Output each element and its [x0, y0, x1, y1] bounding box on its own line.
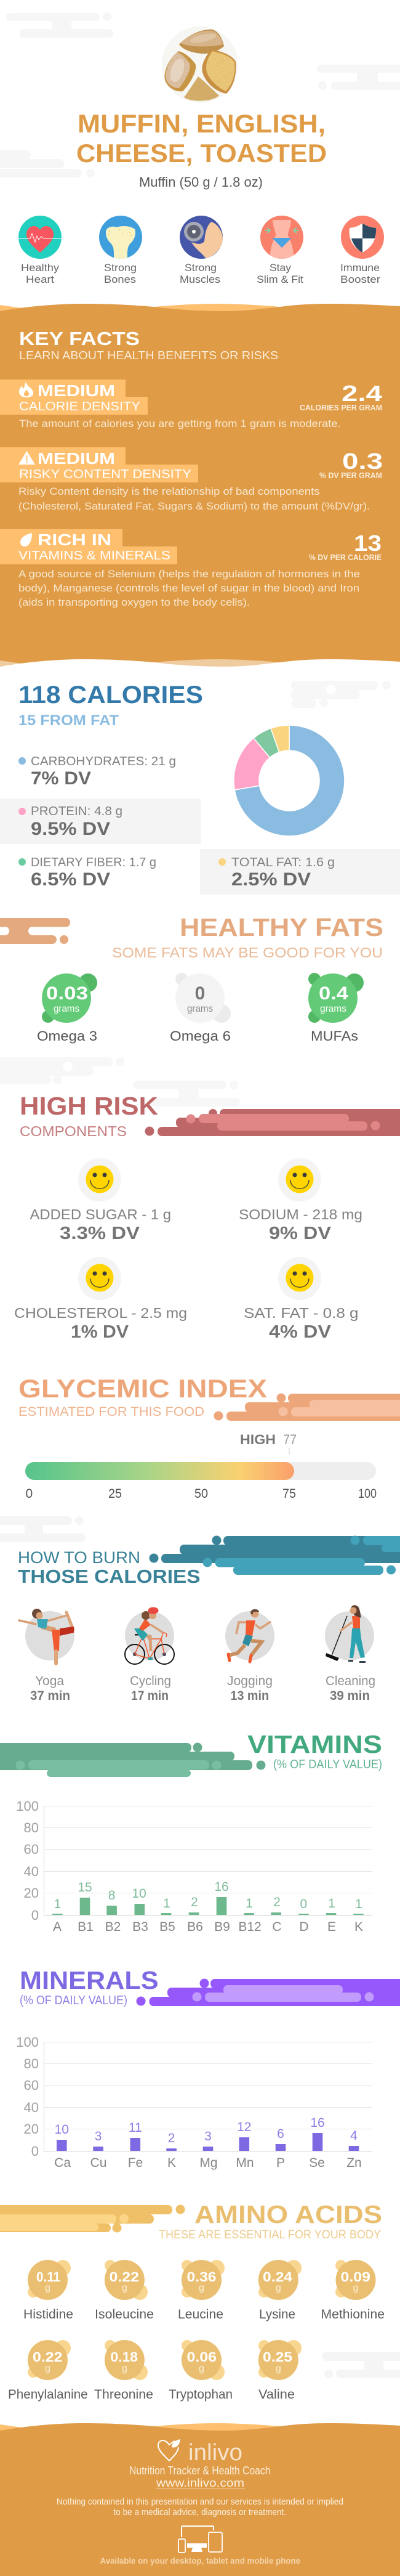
- amino: isoleucine: g: [122, 2283, 127, 2293]
- fat: omega 3: 0.03: [46, 983, 88, 1004]
- legend: dietary fiber: [18, 856, 156, 890]
- bar chart: vitamins: 16: [214, 1880, 229, 1894]
- decorative cloud: amino acids: [322, 2352, 400, 2378]
- fat: MUFAs: 0.4: [319, 983, 348, 1004]
- fact: risky content density: MEDIUM: [38, 449, 115, 468]
- benefit: healthy heart: Heart: [26, 274, 54, 285]
- bar chart: vitamins: A: [53, 1920, 62, 1934]
- title: [76, 109, 327, 168]
- heading: amino acids: AMINO ACIDS: [194, 2200, 382, 2229]
- tagline and website: www.inlivo.com: [156, 2477, 244, 2489]
- serving size: Muffin (50 g / 1.8 oz): [139, 174, 263, 190]
- amino: leucine: Leucine: [178, 2307, 223, 2322]
- bar chart: minerals: Se: [309, 2156, 325, 2170]
- disclaimer: [57, 2497, 343, 2517]
- amino: methionine: g: [353, 2283, 358, 2293]
- bar chart: vitamins: 0: [31, 1908, 39, 1923]
- heading: calories: 118 CALORIES: [18, 681, 203, 709]
- benefit: strong muscles: Strong: [185, 262, 217, 274]
- fact: rich in vitamins and minerals: RICH IN: [38, 530, 111, 549]
- amino: phenylalanine: Phenylalanine: [8, 2387, 88, 2402]
- bar chart: vitamins: 60: [24, 1842, 39, 1857]
- heading: glycemic index: [18, 1374, 267, 1419]
- decoration: amino acids band: [0, 2204, 185, 2233]
- decoration: glycemic band: [214, 1394, 400, 1421]
- amino: isoleucine: [95, 2260, 154, 2322]
- bar chart: minerals: 3: [95, 2129, 102, 2143]
- risk: cholesterol: CHOLESTEROL - 2.5 mg: [14, 1305, 187, 1321]
- bar chart: vitamins: 100: [16, 1798, 39, 1814]
- amino: histidine: 0.11: [36, 2269, 60, 2285]
- activity: cleaning: [325, 1605, 375, 1703]
- gauge: glycemic index value: 25: [108, 1487, 122, 1501]
- amino: lysine: g: [276, 2283, 281, 2293]
- bar chart: vitamins: 1: [54, 1897, 61, 1911]
- benefit: immune booster: Immune: [340, 262, 380, 274]
- bar chart: minerals: 40: [24, 2100, 39, 2115]
- benefit: healthy heart: Healthy: [21, 262, 60, 274]
- panel: key facts background: [0, 304, 400, 678]
- activity: jogging: [225, 1609, 274, 1703]
- activity: yoga: [19, 1609, 74, 1703]
- availability note: Available on your desktop, tablet and mobile phone: [100, 2556, 300, 2566]
- bar chart: minerals: 80: [24, 2056, 39, 2071]
- risk: sodium: 9% DV: [269, 1224, 332, 1243]
- fact: risky content density: RISKY CONTENT DENSITY: [19, 468, 191, 481]
- heading: calories: [18, 681, 203, 729]
- bar chart: vitamins: B9: [214, 1920, 230, 1934]
- food photo: english muffin: [162, 26, 238, 103]
- heading: minerals: [20, 1966, 159, 2007]
- legend: protein: [0, 798, 201, 844]
- disclaimer: Nothing contained in this presentation and our services is intended or implied: [57, 2497, 343, 2507]
- bar chart: minerals: 2: [168, 2131, 175, 2145]
- risk: added sugar: [30, 1158, 171, 1243]
- amino: valine: [258, 2340, 302, 2402]
- bar chart: vitamins: B2: [105, 1920, 121, 1934]
- bar chart: vitamins: D: [299, 1920, 309, 1934]
- amino: histidine: Histidine: [23, 2307, 73, 2322]
- amino: lysine: Lysine: [259, 2307, 295, 2322]
- bar chart: minerals: Ca: [54, 2156, 71, 2170]
- fat: omega 3: grams: [54, 1004, 79, 1014]
- bar chart: vitamins: 40: [24, 1864, 39, 1879]
- bar chart: vitamins: 8: [108, 1888, 115, 1903]
- bar chart: minerals: 6: [277, 2127, 284, 2141]
- legend: carbohydrates: 7% DV: [31, 768, 91, 789]
- amino: phenylalanine: g: [45, 2363, 50, 2374]
- risk: sodium: SODIUM - 218 mg: [239, 1206, 362, 1222]
- amino: valine: Valine: [258, 2387, 295, 2402]
- heading: key facts: [19, 328, 278, 362]
- bar chart: vitamins: B1: [78, 1920, 94, 1934]
- bar chart: minerals: 4: [350, 2129, 358, 2143]
- decorative clouds: header: [0, 12, 400, 177]
- heading: how to burn those calories: THOSE CALORIES: [18, 1566, 201, 1587]
- fact: calorie density: The amount of calories you are getting from 1 gram is moderate.: [19, 418, 341, 429]
- gauge: glycemic index value: HIGH: [240, 1432, 276, 1447]
- amino: lysine: [258, 2260, 302, 2322]
- legend: dietary fiber: DIETARY FIBER: 1.7 g: [31, 856, 156, 869]
- benefit: stay slim and fit: [257, 216, 303, 285]
- activity: yoga: 37 min: [30, 1689, 70, 1703]
- benefit: strong bones: [99, 216, 142, 285]
- activity: cleaning: 39 min: [330, 1689, 370, 1703]
- fat: omega 6: [170, 973, 231, 1044]
- benefit: immune booster: Booster: [340, 274, 380, 285]
- bar chart: vitamins: B6: [187, 1920, 203, 1934]
- tagline and website: [129, 2464, 271, 2489]
- fact: calorie density: CALORIE DENSITY: [19, 400, 140, 413]
- bar chart: minerals: 10: [55, 2123, 69, 2137]
- legend: protein: PROTEIN: 4.8 g: [31, 805, 122, 818]
- title: CHEESE, TOASTED: [76, 139, 327, 168]
- legend: carbohydrates: [18, 755, 176, 789]
- fact: rich in vitamins and minerals: 13: [354, 530, 382, 556]
- fact: rich in vitamins and minerals: body), Manganese (controls the level of sugar in the blood) and Iron: [18, 582, 359, 594]
- bar chart: minerals: 100: [16, 2034, 39, 2050]
- risk: cholesterol: 1% DV: [71, 1322, 129, 1342]
- fat: omega 6: Omega 6: [170, 1028, 231, 1044]
- bar chart: vitamins: 10: [132, 1887, 146, 1901]
- fact: risky content density: % DV PER GRAM: [319, 471, 382, 480]
- activity: cleaning: Cleaning: [326, 1674, 375, 1688]
- bar chart: minerals: Fe: [128, 2156, 143, 2170]
- legend: total fat: 2.5% DV: [231, 869, 311, 890]
- heading: vitamins: (% OF DAILY VALUE): [273, 1758, 382, 1771]
- activity: yoga: Yoga: [35, 1674, 64, 1688]
- benefit: stay slim and fit: Slim & Fit: [257, 274, 303, 285]
- bar chart: vitamins: K: [354, 1920, 363, 1934]
- benefit: immune booster: [340, 216, 384, 285]
- decoration: minerals band: [137, 1979, 400, 2006]
- decorative cloud: calories: [291, 681, 391, 708]
- bar chart: vitamins: [16, 1798, 373, 1934]
- bar chart: vitamins: 1: [246, 1896, 253, 1911]
- decoration: burn band: [149, 1535, 400, 1575]
- bar chart: minerals: Mn: [236, 2156, 254, 2170]
- bar chart: vitamins: 20: [24, 1885, 39, 1901]
- benefit: strong bones: Strong: [104, 262, 137, 274]
- heading: amino acids: [159, 2200, 382, 2241]
- fact: risky content density: 0.3: [342, 449, 383, 474]
- logo: inlivo: inlivo: [188, 2440, 242, 2466]
- heading: vitamins: [247, 1730, 382, 1771]
- risk: sodium: [239, 1158, 362, 1243]
- benefit: healthy heart: [18, 216, 62, 285]
- amino: tryptophan: [169, 2340, 233, 2402]
- heading: how to burn those calories: HOW TO BURN: [18, 1548, 140, 1567]
- activity: jogging: Jogging: [227, 1674, 273, 1688]
- fact: calorie density: 2.4: [342, 381, 382, 406]
- donut chart: macronutrients: [234, 725, 345, 836]
- disclaimer: to be a medical advice, diagnosis or treatment.: [113, 2508, 286, 2517]
- heading: key facts: LEARN ABOUT HEALTH BENEFITS OR RISKS: [19, 349, 278, 362]
- heading: minerals: (% OF DAILY VALUE): [20, 1994, 127, 2007]
- bar chart: vitamins: B5: [159, 1920, 175, 1934]
- activity: cycling: 17 min: [131, 1689, 169, 1703]
- decorative clouds: high risk: [0, 1057, 240, 1107]
- fat: MUFAs: MUFAs: [311, 1028, 358, 1044]
- fact: rich in vitamins and minerals: VITAMINS & MINERALS: [18, 549, 170, 563]
- risk: saturated fat: SAT. FAT - 0.8 g: [244, 1305, 358, 1321]
- gauge: glycemic index value: 50: [194, 1487, 208, 1501]
- amino: isoleucine: Isoleucine: [95, 2307, 154, 2322]
- decoration: healthy fats band: [0, 918, 71, 944]
- decorative cloud: burn: [0, 1516, 86, 1542]
- tagline and website: Nutrition Tracker & Health Coach: [129, 2464, 271, 2477]
- fact: risky content density: Risky Content density is the relationship of bad components: [18, 486, 320, 497]
- bar chart: vitamins: 1: [355, 1897, 362, 1911]
- amino: methionine: Methionine: [321, 2307, 385, 2322]
- bar chart: minerals: K: [167, 2156, 176, 2170]
- bar chart: vitamins: 80: [24, 1820, 39, 1835]
- fact: risky content density: [0, 447, 383, 512]
- gauge: glycemic index value: 100: [358, 1487, 377, 1501]
- footer background: [0, 2423, 400, 2576]
- amino: threonine: 0.18: [111, 2349, 138, 2365]
- bar chart: vitamins: 1: [163, 1896, 170, 1911]
- amino: valine: 0.25: [263, 2349, 292, 2365]
- bar chart: vitamins: 15: [78, 1880, 92, 1895]
- legend: dietary fiber: 6.5% DV: [31, 869, 110, 890]
- decoration: high risk band: [145, 1109, 400, 1136]
- fact: rich in vitamins and minerals: (aids in transporting oxygen to the body cells).: [18, 596, 250, 608]
- bar chart: minerals: [16, 2034, 373, 2170]
- risk: cholesterol: [14, 1257, 187, 1342]
- legend: total fat: TOTAL FAT: 1.6 g: [231, 856, 335, 869]
- heading: how to burn those calories: [18, 1548, 201, 1587]
- bar chart: vitamins: 2: [273, 1895, 281, 1909]
- bar chart: vitamins: 2: [191, 1895, 198, 1909]
- heading: vitamins: VITAMINS: [247, 1730, 382, 1758]
- fat: MUFAs: grams: [320, 1004, 346, 1014]
- logo: inlivo: [158, 2439, 242, 2466]
- legend: protein: 9.5% DV: [31, 819, 110, 839]
- fat: omega 3: [37, 973, 97, 1044]
- benefit: strong bones: Bones: [104, 274, 136, 285]
- amino: tryptophan: 0.06: [187, 2349, 217, 2365]
- heading: healthy fats: HEALTHY FATS: [180, 913, 383, 941]
- activity: cycling: Cycling: [130, 1674, 171, 1688]
- risk: saturated fat: [244, 1257, 358, 1342]
- amino: tryptophan: Tryptophan: [169, 2387, 233, 2402]
- legend: carbohydrates: CARBOHYDRATES: 21 g: [31, 755, 176, 768]
- fact: calorie density: [0, 380, 382, 429]
- amino: threonine: [94, 2340, 153, 2402]
- heading: key facts: KEY FACTS: [19, 328, 140, 349]
- bar chart: minerals: 11: [129, 2121, 142, 2135]
- gauge: glycemic index value: 0: [26, 1487, 33, 1501]
- fact: calorie density: CALORIES PER GRAM: [300, 403, 382, 412]
- amino: isoleucine: 0.22: [110, 2269, 139, 2285]
- bar chart: vitamins: 0: [300, 1897, 307, 1911]
- heading: glycemic index: GLYCEMIC INDEX: [18, 1374, 267, 1403]
- fact: rich in vitamins and minerals: % DV PER CALORIE: [309, 553, 382, 562]
- amino: lysine: 0.24: [263, 2269, 293, 2285]
- bar chart: vitamins: E: [327, 1920, 336, 1934]
- heading: high risk: [20, 1092, 158, 1139]
- gauge: glycemic index value: 75: [282, 1487, 296, 1501]
- fact: risky content density: (Cholesterol, Saturated Fat, Sugars & Sodium) to the amount (%DV/gr).: [18, 500, 370, 512]
- fact: rich in vitamins and minerals: A good source of Selenium (helps the regulation of hormones in the: [18, 568, 360, 580]
- heading: high risk: HIGH RISK: [20, 1092, 158, 1120]
- bar chart: vitamins: C: [272, 1920, 282, 1934]
- amino: threonine: Threonine: [94, 2387, 153, 2402]
- amino: valine: g: [276, 2363, 281, 2374]
- benefit: strong muscles: Muscles: [180, 274, 220, 285]
- bar chart: minerals: Zn: [346, 2156, 362, 2170]
- fat: omega 6: 0: [195, 983, 205, 1004]
- amino: methionine: 0.09: [341, 2269, 370, 2285]
- amino: tryptophan: g: [199, 2363, 204, 2374]
- bar chart: minerals: 20: [24, 2121, 39, 2137]
- fact: calorie density: MEDIUM: [38, 381, 115, 400]
- heading: high risk: COMPONENTS: [20, 1123, 127, 1139]
- benefit: stay slim and fit: Stay: [270, 262, 291, 274]
- gauge: glycemic index value: [25, 1432, 377, 1501]
- heading: glycemic index: ESTIMATED FOR THIS FOOD: [18, 1405, 204, 1419]
- bar chart: minerals: 3: [204, 2129, 212, 2143]
- heading: healthy fats: [112, 913, 383, 961]
- bar chart: minerals: 0: [31, 2143, 39, 2159]
- risk: added sugar: ADDED SUGAR - 1 g: [30, 1206, 171, 1222]
- benefit: strong muscles: [180, 216, 223, 285]
- bar chart: minerals: Cu: [90, 2156, 106, 2170]
- amino: methionine: [321, 2260, 385, 2322]
- heading: amino acids: THESE ARE ESSENTIAL FOR YOUR BODY: [159, 2228, 381, 2241]
- bar chart: vitamins: 1: [328, 1896, 335, 1911]
- decoration: vitamins band: [0, 1742, 266, 1777]
- fact: rich in vitamins and minerals: [0, 529, 382, 608]
- bar chart: minerals: 12: [237, 2120, 251, 2134]
- amino: leucine: [178, 2260, 225, 2322]
- bar chart: vitamins: B3: [132, 1920, 148, 1934]
- heading: calories: 15 FROM FAT: [18, 712, 119, 729]
- risk: saturated fat: 4% DV: [269, 1322, 332, 1342]
- bar chart: minerals: 60: [24, 2078, 39, 2093]
- activity: jogging: 13 min: [230, 1689, 269, 1703]
- amino: leucine: 0.36: [187, 2269, 217, 2285]
- fat: MUFAs: [308, 973, 364, 1044]
- bar chart: minerals: P: [276, 2156, 285, 2170]
- legend: total fat: [200, 849, 400, 895]
- bar chart: minerals: Mg: [199, 2156, 218, 2170]
- bar chart: vitamins: B12: [238, 1920, 262, 1934]
- title: MUFFIN, ENGLISH,: [78, 109, 326, 138]
- amino: threonine: g: [122, 2363, 127, 2374]
- amino: phenylalanine: 0.22: [33, 2349, 63, 2365]
- risk: added sugar: 3.3% DV: [60, 1224, 140, 1243]
- amino: phenylalanine: [8, 2340, 88, 2402]
- icon: devices: [178, 2526, 222, 2553]
- fat: omega 6: grams: [187, 1004, 213, 1014]
- heading: minerals: MINERALS: [20, 1966, 159, 1994]
- fat: omega 3: Omega 3: [37, 1028, 97, 1044]
- amino: histidine: g: [45, 2283, 50, 2293]
- heading: healthy fats: SOME FATS MAY BE GOOD FOR YOU: [112, 945, 383, 961]
- amino: histidine: [23, 2260, 73, 2322]
- amino: leucine: g: [199, 2283, 204, 2293]
- activity: cycling: [125, 1607, 174, 1703]
- gauge: glycemic index value: 77: [283, 1432, 297, 1447]
- bar chart: minerals: 16: [310, 2116, 325, 2130]
